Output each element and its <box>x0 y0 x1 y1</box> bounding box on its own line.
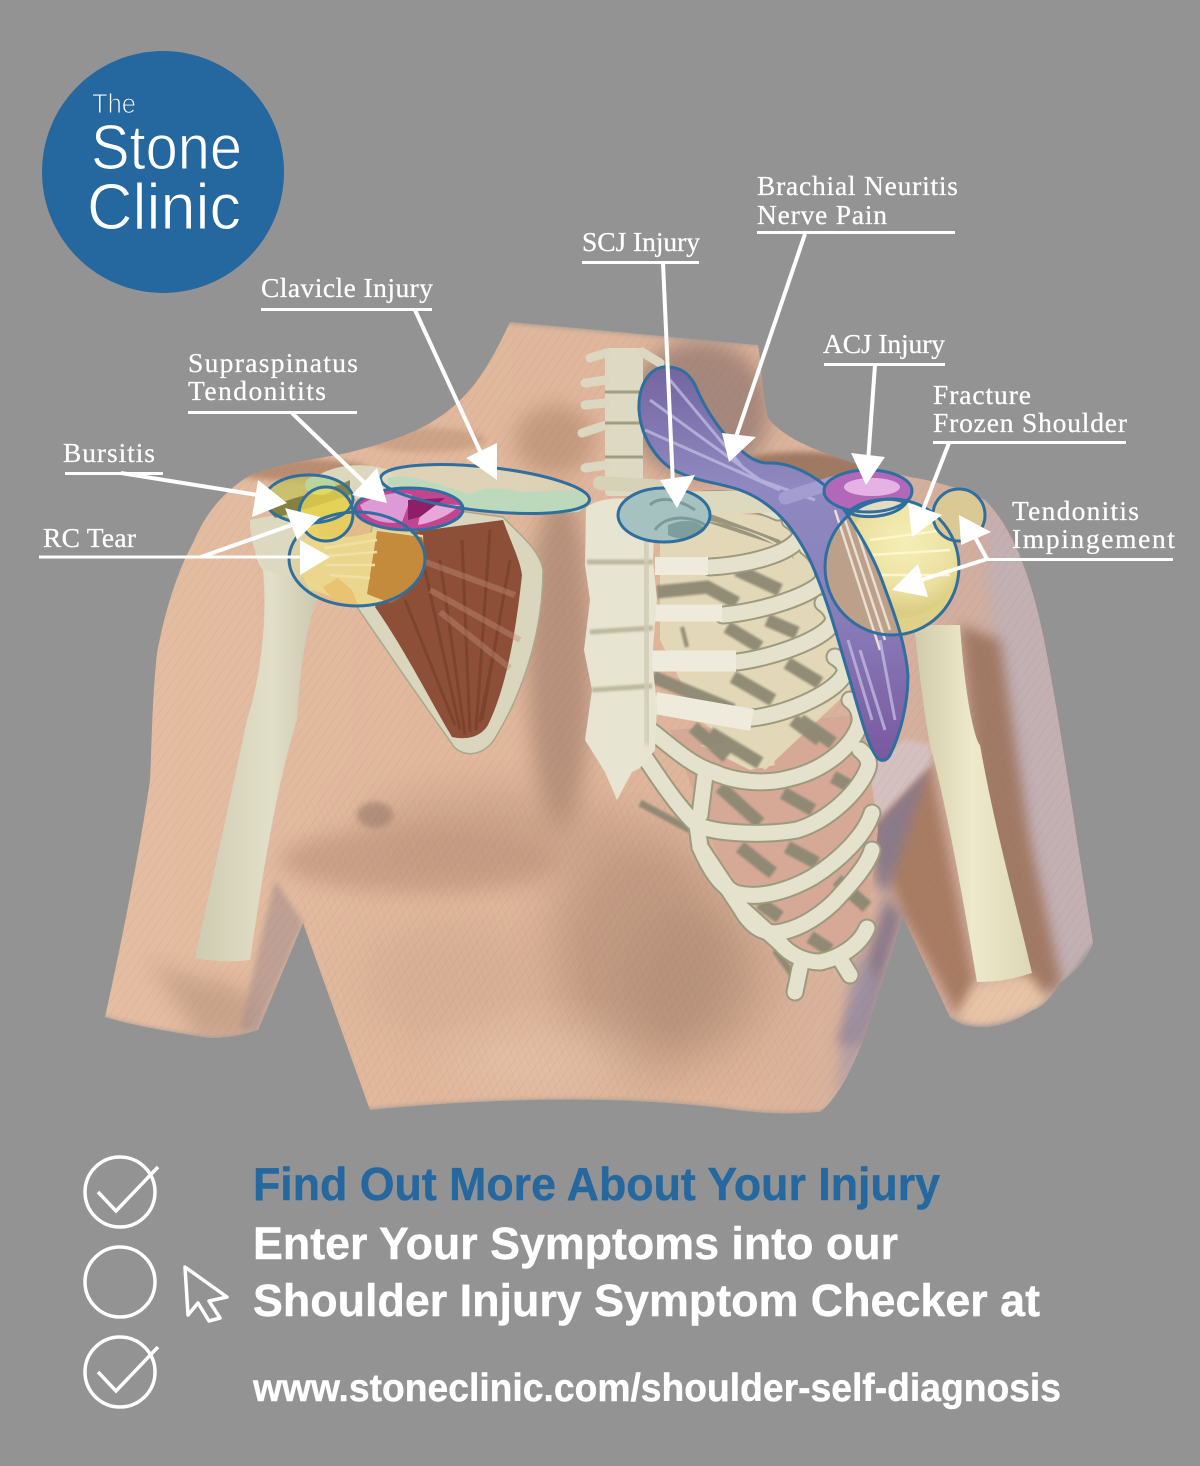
label: SCJ Injury <box>582 226 700 508</box>
sternum <box>584 498 657 800</box>
label: Bursitis: Bursitis <box>63 437 155 468</box>
label: Fracture Frozen Shoulder: Fracture <box>933 379 1031 410</box>
logo: The Stone Clinic: The <box>92 88 136 119</box>
SCJ zone <box>618 488 710 542</box>
left clavicle zone fill <box>378 456 592 522</box>
spine <box>582 348 665 496</box>
right humerus <box>914 625 1032 982</box>
label: Brachial Neuritis Nerve Pain <box>722 170 958 462</box>
right arm tones <box>986 514 1092 974</box>
label: SCJ Injury: SCJ Injury <box>582 226 700 257</box>
brachial plexus zone <box>637 365 910 762</box>
logo: The Stone Clinic <box>42 51 284 293</box>
label: Tendonitis Impingement <box>892 495 1175 597</box>
label: Brachial Neuritis Nerve Pain: Nerve Pain <box>757 199 887 230</box>
label: Brachial Neuritis Nerve Pain: Brachial Neuritis <box>757 170 958 201</box>
call to action text: Enter Your Symptoms into our <box>253 1218 898 1269</box>
logo: The Stone Clinic: Stone <box>91 113 242 183</box>
label: Fracture Frozen Shoulder <box>908 379 1127 537</box>
website url: www.stoneclinic.com/shoulder-self-diagnosis <box>252 1367 1061 1410</box>
anatomical torso illustration <box>90 310 1110 1140</box>
right clavicle ACJ zone <box>824 470 912 517</box>
label: ACJ Injury: ACJ Injury <box>823 328 945 359</box>
left shoulder highlighted zones <box>265 456 592 606</box>
label: Bursitis <box>63 437 287 517</box>
left supraspinatus tendon fan <box>299 530 424 606</box>
soft edges of torso <box>100 318 1097 1117</box>
humeral head and tendon outlines <box>825 489 985 635</box>
label: Clavicle Injury: Clavicle Injury <box>261 272 433 303</box>
label: Clavicle Injury <box>261 272 497 480</box>
label: Tendonitis Impingement: Impingement <box>1012 523 1175 554</box>
label: Supraspinatus Tendonitits <box>188 347 387 503</box>
label: Fracture Frozen Shoulder: Frozen Shoulder <box>933 407 1127 438</box>
label: Supraspinatus Tendonitits: Supraspinatus <box>188 347 358 378</box>
icon: mouse cursor <box>185 1267 227 1321</box>
left acromion and shoulder bones <box>317 465 400 500</box>
right shoulder bones and humeral head <box>680 480 984 635</box>
icon: empty circle <box>85 1247 155 1317</box>
label: RC Tear: RC Tear <box>43 522 136 553</box>
icon: checked circle <box>85 1337 158 1407</box>
left humerus <box>195 530 345 961</box>
torso skin <box>90 310 1110 1140</box>
call to action text: Shoulder Injury Symptom Checker at <box>253 1275 1040 1326</box>
logo: The Stone Clinic: Clinic <box>87 170 241 243</box>
left clavicle (green) <box>388 476 586 514</box>
rib cage <box>640 500 878 992</box>
icon: checked circle <box>85 1157 158 1227</box>
scapula <box>357 500 543 754</box>
label: Supraspinatus Tendonitits: Tendonitits <box>188 375 326 406</box>
call to action heading: Find Out More About Your Injury <box>253 1158 940 1210</box>
call to action text <box>253 1218 1040 1326</box>
label: Tendonitis Impingement: Tendonitis <box>1012 495 1139 526</box>
label: ACJ Injury <box>823 328 945 485</box>
label: RC Tear <box>39 508 330 575</box>
